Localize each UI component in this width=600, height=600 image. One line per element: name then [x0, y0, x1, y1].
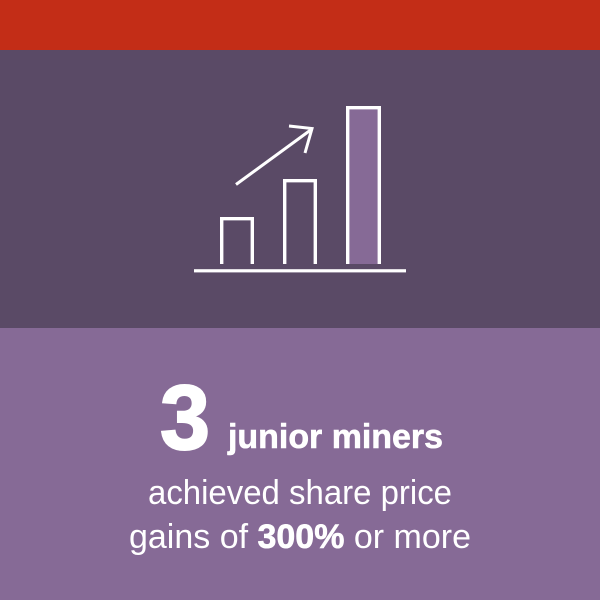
chart baseline	[194, 269, 406, 272]
panel: red top band	[0, 0, 600, 50]
bar: small	[222, 219, 252, 264]
bar: tall highlighted	[348, 108, 379, 264]
icon: rising bar chart with arrow	[194, 108, 406, 272]
heading: junior miners: junior miners	[227, 418, 443, 456]
arrow: upward trend	[236, 126, 312, 184]
panel: light purple text area	[0, 328, 600, 600]
text line: gains of 300% or more: gains of 300% or more	[129, 518, 471, 556]
bar: medium	[285, 181, 315, 264]
text line: achieved share price: achieved share price	[148, 474, 452, 512]
big number: 3	[160, 367, 210, 469]
panel: dark purple chart area	[0, 50, 600, 328]
